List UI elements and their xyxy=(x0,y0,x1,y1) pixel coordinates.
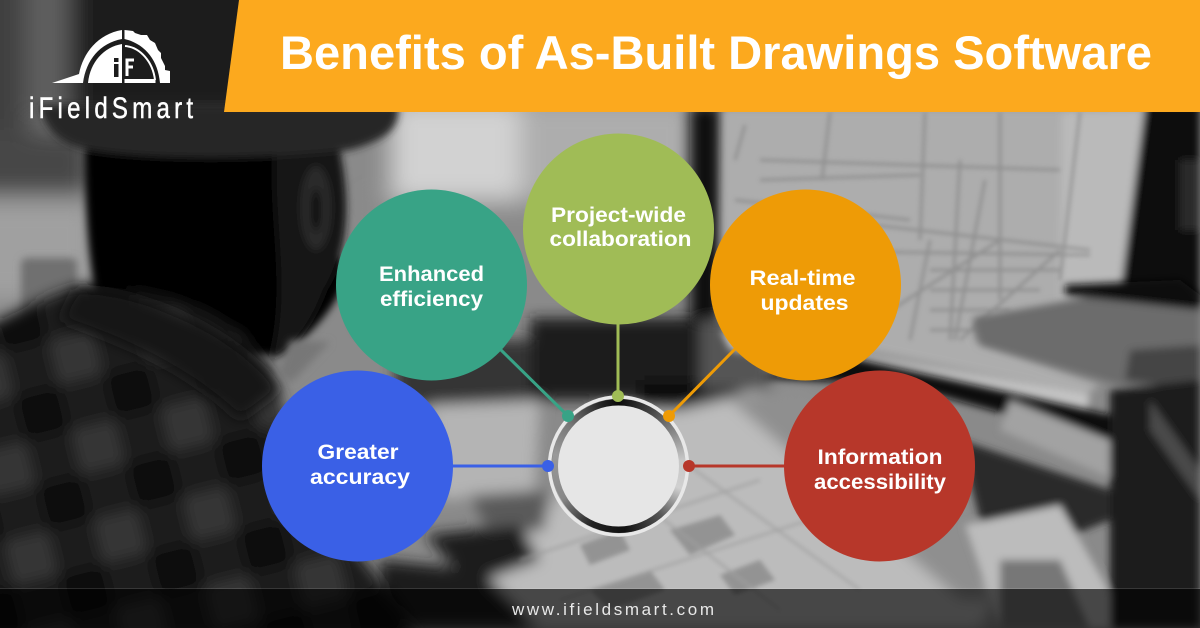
circle: information accessibility: Information xyxy=(818,446,942,469)
dot: information accessibility xyxy=(683,460,695,472)
icon: hard hat gear logo xyxy=(52,30,170,83)
circle: project-wide collaboration: Project-wide xyxy=(551,204,686,227)
footer bar xyxy=(0,588,1200,628)
circle: real-time updates: updates xyxy=(760,292,848,315)
background: printed plan marks on desk xyxy=(520,430,860,610)
title banner xyxy=(224,0,1200,112)
circle: greater accuracy xyxy=(262,370,453,562)
connector: enhanced efficiency xyxy=(500,349,568,416)
circle: real-time updates: Real-time xyxy=(750,267,856,290)
title: Benefits of As-Built Drawings Software xyxy=(280,26,1152,79)
connector: project-wide collaboration xyxy=(616,324,620,396)
background: desk, keyboard and dark objects xyxy=(380,105,1000,628)
circle: enhanced efficiency: Enhanced xyxy=(379,263,484,286)
background: plaid shirt xyxy=(0,285,420,628)
background: engineer silhouette and hard hat xyxy=(40,105,398,360)
logo xyxy=(29,30,193,125)
circle: real-time updates xyxy=(710,190,901,380)
background: cup on the left xyxy=(21,258,77,320)
background: right desk and papers xyxy=(760,280,1200,628)
circle: greater accuracy: accuracy xyxy=(310,466,410,489)
circle: information accessibility xyxy=(784,370,975,562)
background: drawing lines on monitor xyxy=(735,112,1090,340)
circle: greater accuracy: Greater xyxy=(318,441,398,464)
background: shirt collar xyxy=(60,290,280,420)
connector: information accessibility xyxy=(689,464,786,468)
connector: greater accuracy xyxy=(452,464,548,468)
background: neck highlight xyxy=(278,340,330,382)
dot: real-time updates xyxy=(663,410,675,422)
circle: enhanced efficiency: efficiency xyxy=(380,288,483,311)
dot: greater accuracy xyxy=(542,460,554,472)
circle: project-wide collaboration xyxy=(523,134,714,324)
icon: iF monogram xyxy=(114,58,134,77)
background: monitor showing drawing xyxy=(720,105,1200,420)
center hub xyxy=(542,390,695,535)
circle: project-wide collaboration: collaboration xyxy=(550,228,692,251)
circle: information accessibility: accessibility xyxy=(814,471,946,494)
dot: enhanced efficiency xyxy=(562,410,574,422)
circle: enhanced efficiency xyxy=(336,190,527,380)
background: rear wall behind worker xyxy=(0,0,700,320)
dot: project-wide collaboration xyxy=(612,390,624,402)
connector: real-time updates xyxy=(669,349,735,416)
logo wordmark: iFieldSmart xyxy=(29,90,193,125)
footer website: www.ifieldsmart.com xyxy=(511,600,714,619)
